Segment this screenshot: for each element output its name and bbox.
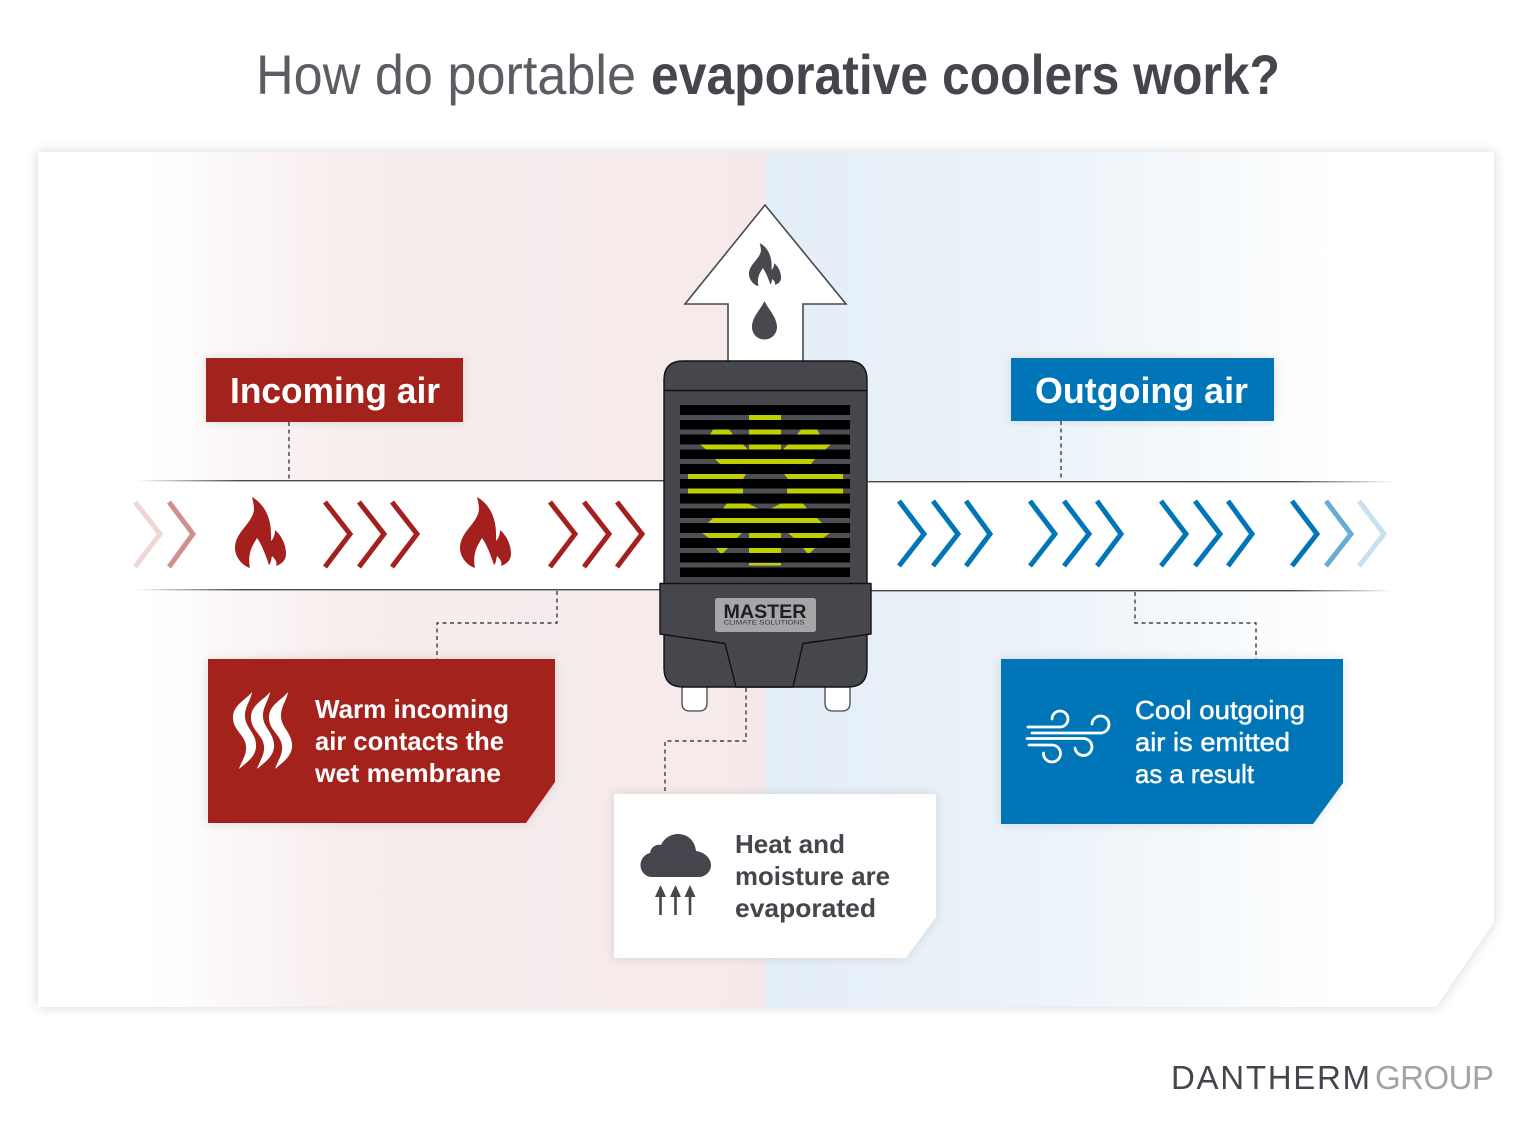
grille [680, 405, 850, 577]
logo: Dantherm Group: GROUP [1375, 1059, 1494, 1096]
unit body [664, 361, 867, 687]
evaporative cooler unit [660, 361, 871, 711]
outgoing air band [866, 481, 1394, 591]
icon: heat waves [233, 692, 292, 769]
brand badge: MASTER [724, 602, 807, 623]
callout text: air is emitted [1135, 727, 1290, 757]
logo: Dantherm Group: DANTHERM [1171, 1059, 1370, 1096]
callout text [1135, 695, 1305, 789]
icon: wind [1027, 711, 1109, 762]
callout text: Warm incoming [315, 694, 509, 724]
outgoing chevrons [899, 501, 1384, 566]
callout: warm incoming air [208, 659, 555, 823]
unit feet [682, 686, 850, 711]
dashed connectors [289, 421, 1256, 794]
callout text [314, 694, 509, 788]
icon: flame 1 [235, 497, 286, 568]
incoming air band [136, 480, 666, 590]
callout: cool outgoing air [1001, 659, 1343, 824]
callout text: wet membrane [314, 758, 501, 788]
label: incoming air [206, 358, 463, 422]
callout text: Cool outgoing [1135, 695, 1305, 725]
icon: cloud with rising arrows [640, 834, 711, 915]
fan blades [688, 415, 843, 566]
label: outgoing air: Outgoing air [1035, 370, 1248, 411]
icon: flame 2 [460, 497, 511, 568]
label: outgoing air [1011, 358, 1274, 421]
logo: Dantherm Group [1171, 1059, 1494, 1096]
callout: heat and moisture [614, 794, 936, 958]
title [256, 43, 1280, 106]
callout text: Heat and [735, 829, 845, 859]
lower housing [660, 584, 871, 687]
callout text: air contacts the [315, 726, 504, 756]
label: incoming air: Incoming air [230, 370, 440, 411]
callout text: as a result [1135, 759, 1255, 789]
icon: flame in arrow [749, 243, 781, 286]
title: How do portable [256, 43, 636, 106]
brand badge: CLIMATE SOLUTIONS [724, 620, 805, 626]
title: evaporative coolers work? [651, 43, 1280, 106]
icon: water drop [752, 301, 777, 340]
callout text [735, 829, 890, 923]
incoming chevrons [135, 502, 642, 567]
arrow: heat and moisture rising [685, 205, 846, 362]
callout text: evaporated [735, 893, 876, 923]
brand badge [715, 598, 816, 632]
callout text: moisture are [735, 861, 890, 891]
panel: background [38, 152, 1494, 1007]
